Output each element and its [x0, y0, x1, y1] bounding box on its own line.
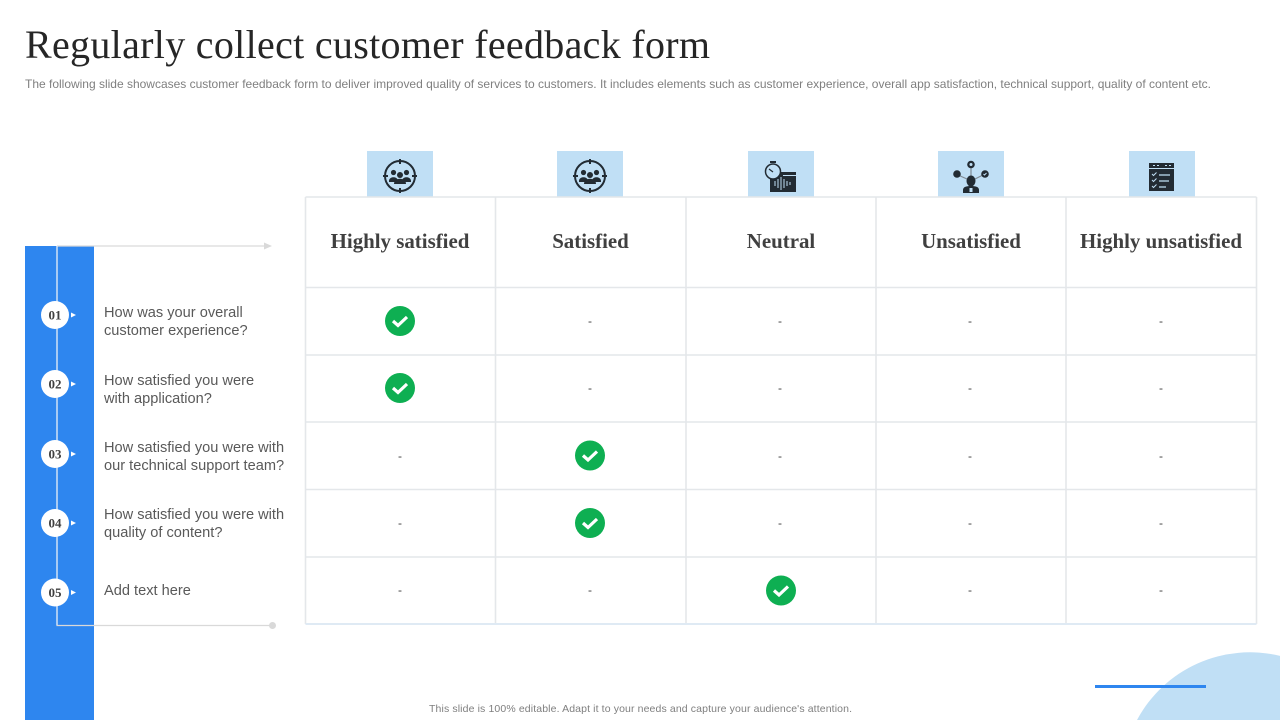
row 1 values: -: [968, 314, 972, 328]
question 01: customer experience?: [104, 323, 248, 339]
subtitle: The following slide showcases customer feedback form to deliver improved quality of services to customers. It includes elements such as customer experience, overall app satisfaction, technical support, quality of content etc.: [25, 77, 1211, 91]
row 3 values: [398, 440, 1163, 470]
table: satisfaction grid: [306, 197, 1256, 624]
column headers: Satisfied: [552, 229, 629, 253]
row 2 values: -: [778, 381, 782, 395]
row 5 values: -: [398, 583, 402, 597]
icon: target audience (highly satisfied): [367, 151, 433, 197]
row 3 values: -: [398, 449, 402, 463]
row 5 values: [398, 576, 1163, 606]
icon: target audience (satisfied): [557, 151, 623, 197]
column headers: [331, 229, 1242, 253]
row 4 values: -: [1159, 516, 1163, 530]
column headers: Neutral: [747, 229, 815, 253]
column headers: Highly satisfied: [331, 229, 470, 253]
row 4 values: [398, 508, 1163, 538]
question 02: How satisfied you were: [104, 373, 254, 389]
row 1 values: -: [588, 314, 592, 328]
question 02: 02: [48, 376, 62, 392]
column headers: Unsatisfied: [921, 229, 1021, 253]
row 4 values: -: [778, 516, 782, 530]
question 04: [41, 507, 284, 541]
title: Regularly collect customer feedback form: [25, 22, 710, 67]
blue sidebar bar: [25, 246, 94, 720]
row 2 values: -: [588, 381, 592, 395]
row 2 values: [385, 373, 1163, 403]
row 4 values: -: [968, 516, 972, 530]
row 4 values: -: [398, 516, 402, 530]
icon: person with options (unsatisfied): [938, 151, 1004, 197]
timeline connector with arrow and end dot: [57, 242, 276, 629]
question 01: How was your overall: [104, 305, 243, 321]
question 05: 05: [48, 585, 62, 600]
row 5 values: -: [1159, 583, 1163, 597]
question 04: How satisfied you were with: [104, 507, 284, 523]
panel: question sidebar: [25, 242, 284, 720]
footer note: This slide is 100% editable. Adapt it to your needs and capture your audience's attention.: [429, 703, 852, 715]
question 03: [41, 440, 284, 474]
icon: stopwatch and audio panel (neutral): [748, 151, 814, 197]
question 04: 04: [48, 516, 62, 530]
row 2 values: -: [968, 381, 972, 395]
accent line: bottom right: [1095, 685, 1206, 688]
question 02: with application?: [103, 391, 212, 407]
row 5 values: -: [968, 583, 972, 597]
question 03: 03: [48, 446, 62, 462]
row 3 values: -: [1159, 449, 1163, 463]
row 3 values: -: [778, 449, 782, 463]
row 5 values: -: [588, 583, 592, 597]
question 05: [41, 578, 191, 606]
column headers: Highly unsatisfied: [1080, 229, 1242, 253]
row 1 values: -: [1159, 314, 1163, 328]
question 04: quality of content?: [104, 525, 222, 541]
row 2 values: -: [1159, 381, 1163, 395]
row 1 values: -: [778, 314, 782, 328]
icon: checklist (highly unsatisfied): [1129, 151, 1195, 197]
question 03: our technical support team?: [104, 458, 284, 474]
question 05: Add text here: [104, 583, 191, 599]
question 02: [41, 370, 254, 407]
decorative circle: bottom right: [1137, 652, 1280, 720]
question 01: [41, 301, 248, 339]
question 01: 01: [48, 308, 62, 322]
row 3 values: -: [968, 449, 972, 463]
question 03: How satisfied you were with: [104, 440, 284, 456]
row 1 values: [385, 306, 1163, 336]
